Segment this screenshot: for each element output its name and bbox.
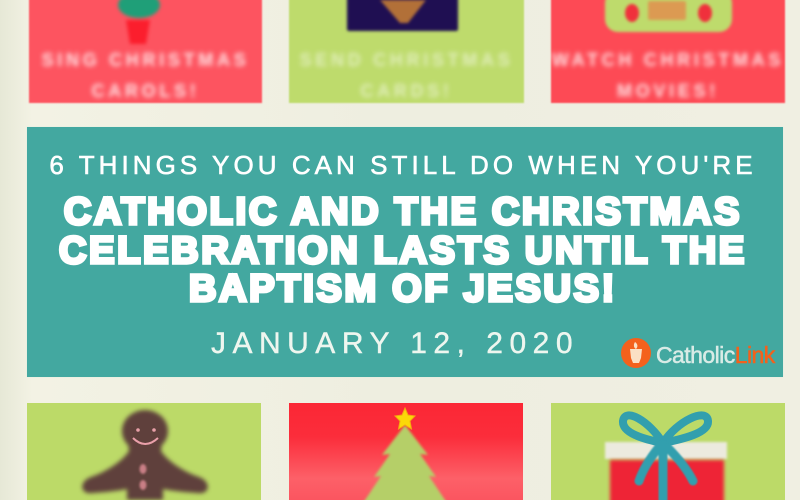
icon: dark card with reindeer [344, 0, 460, 34]
panel: sing christmas carols [29, 0, 262, 103]
panel: gingerbread [27, 403, 261, 500]
title [58, 191, 747, 310]
panel: gift [551, 403, 785, 500]
label: send christmas: SEND CHRISTMAS [300, 50, 513, 70]
title: CATHOLIC AND THE CHRISTMAS [64, 191, 742, 233]
label: sing christmas carols: SING CHRISTMAS [42, 50, 249, 70]
label: watch christmas: WATCH CHRISTMAS [552, 50, 784, 70]
label: movies: MOVIES! [617, 81, 719, 101]
panel: christmas tree [289, 403, 523, 500]
date: JANUARY 12, 2020 [211, 327, 579, 360]
icon: tree with star [363, 407, 447, 500]
icon: gingerbread man [79, 406, 211, 500]
heading: intro line: 6 THINGS YOU CAN STILL DO WHEN YOU'RE [49, 150, 757, 180]
panel: watch christmas movies [551, 0, 785, 103]
icon: film reel [603, 0, 734, 34]
label: carols: CAROLS! [92, 81, 199, 101]
icon: caroler figure [115, 0, 163, 46]
wordmark: CatholicLink [656, 342, 775, 368]
logo: Catholic Link [621, 338, 776, 368]
title: BAPTISM OF JESUS! [189, 268, 617, 310]
title: CELEBRATION LASTS UNTIL THE [59, 230, 747, 272]
icon: orange flame circle [621, 338, 651, 368]
panel: teal title banner [27, 127, 783, 377]
icon: gift box with bow [603, 411, 729, 500]
panel: send christmas cards [289, 0, 524, 103]
label: cards: CARDS! [360, 81, 453, 101]
